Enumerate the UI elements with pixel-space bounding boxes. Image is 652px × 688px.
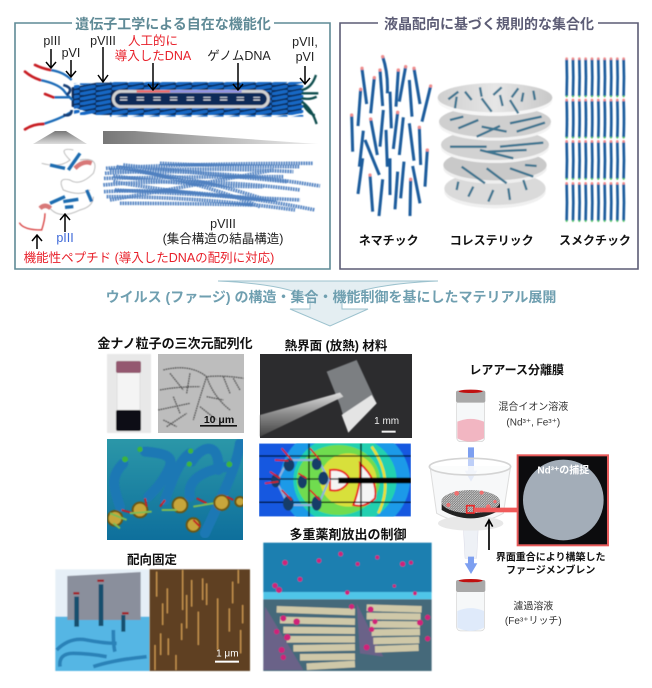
labels and arrows: pIII [43, 34, 61, 48]
labels and arrows: pVI [296, 50, 314, 64]
heading: rare-earth membrane: レアアース分離膜 [469, 362, 564, 377]
arrow and membrane label: 界面重合により構築した [496, 551, 605, 564]
labels and arrows: pVI [62, 46, 80, 60]
text: mixed ion solution: 混合イオン溶液 [498, 400, 568, 413]
phage structure illustration [25, 65, 318, 129]
liquid crystal phase labels: スメクチック [559, 234, 631, 248]
panel: genetic engineering [15, 16, 330, 269]
heading: thermal interface: 熱界面 (放熱) 材料 [285, 338, 388, 353]
connector to inset [474, 508, 518, 512]
cholesteric discs [438, 83, 552, 208]
labels and arrows: 人工的に [128, 33, 178, 48]
labels and arrows: ゲノムDNA [207, 49, 271, 63]
text: mixed ion solution: (Nd³⁺, Fe³⁺) [506, 417, 560, 428]
inset photo: Nd capture: Nd³⁺の捕捉 [537, 463, 589, 476]
illustration: phage on surface [55, 569, 150, 671]
vial: mixed ion solution [456, 390, 485, 442]
micrograph: dendritic assembly [158, 354, 244, 433]
diffraction pattern [259, 443, 411, 517]
text: filtrate: (Fe³⁺リッチ) [505, 615, 562, 627]
vial: filtered solution [456, 579, 485, 631]
liquid crystal phase labels: コレステリック [450, 234, 534, 248]
section: drug release [263, 527, 432, 671]
arrow: outflow [465, 557, 477, 574]
pIII crystal structure [19, 149, 95, 230]
heading: drug release: 多重薬剤放出の制御 [289, 527, 407, 542]
text: filtrate [505, 599, 562, 627]
heading: orientation fixing: 配向固定 [127, 552, 177, 567]
nematic rods [350, 55, 432, 216]
liquid crystal phase labels [359, 234, 631, 248]
micrograph: AFM [150, 569, 250, 671]
photo: gel vial [107, 354, 151, 433]
smectic rods [565, 57, 625, 222]
arrow: inflow [465, 447, 477, 482]
arrow and membrane label [485, 520, 605, 576]
central arrow [218, 281, 438, 326]
filter funnel [429, 458, 511, 558]
labels and arrows: pVII, [292, 35, 318, 49]
pVIII crystal structure [103, 163, 320, 210]
illustration: gold nanoparticles with phage [107, 439, 245, 540]
illustration: multi-drug release [263, 543, 432, 671]
section: gold nanoparticle arrays [97, 336, 253, 540]
photo: film on tweezers [260, 354, 412, 438]
central heading: ウイルス (ファージ) の構造・集合・機能制御を基にしたマテリアル展開 [106, 289, 556, 305]
arrow and membrane label: ファージメンブレン [506, 563, 595, 576]
text: mixed ion solution [498, 400, 568, 428]
panel: liquid crystal assembly [340, 16, 638, 269]
micrograph: AFM: 1 μm [216, 649, 239, 660]
labels and arrows: pIII [56, 231, 74, 245]
micrograph: dendritic assembly: 10 μm [204, 414, 234, 426]
labels and arrows: 機能性ペプチド (導入したDNAの配列に対応) [24, 250, 274, 265]
labels and arrows: pVIII [210, 217, 236, 231]
section: thermal interface material [259, 339, 412, 517]
labels and arrows [24, 33, 318, 265]
heading: liquid crystal assembly: 液晶配向に基づく規則的な集合化 [384, 16, 594, 32]
liquid crystal phase labels: ネマチック [359, 234, 419, 248]
labels and arrows: 導入したDNA [115, 48, 192, 63]
section: oriented immobilisation [55, 552, 250, 671]
magnification wedges [33, 131, 318, 144]
heading: genetic engineering: 遺伝子工学による自在な機能化 [75, 16, 271, 32]
labels and arrows: (集合構造の結晶構造) [163, 231, 283, 246]
text: filtrate: 濾過溶液 [513, 599, 553, 612]
section: rare-earth separation membrane [429, 362, 608, 631]
labels and arrows: pVIII [90, 34, 116, 48]
heading: gold nanoparticles: 金ナノ粒子の三次元配列化 [97, 336, 253, 351]
inset photo: Nd capture [518, 455, 608, 545]
photo: film on tweezers: 1 mm [374, 416, 399, 427]
